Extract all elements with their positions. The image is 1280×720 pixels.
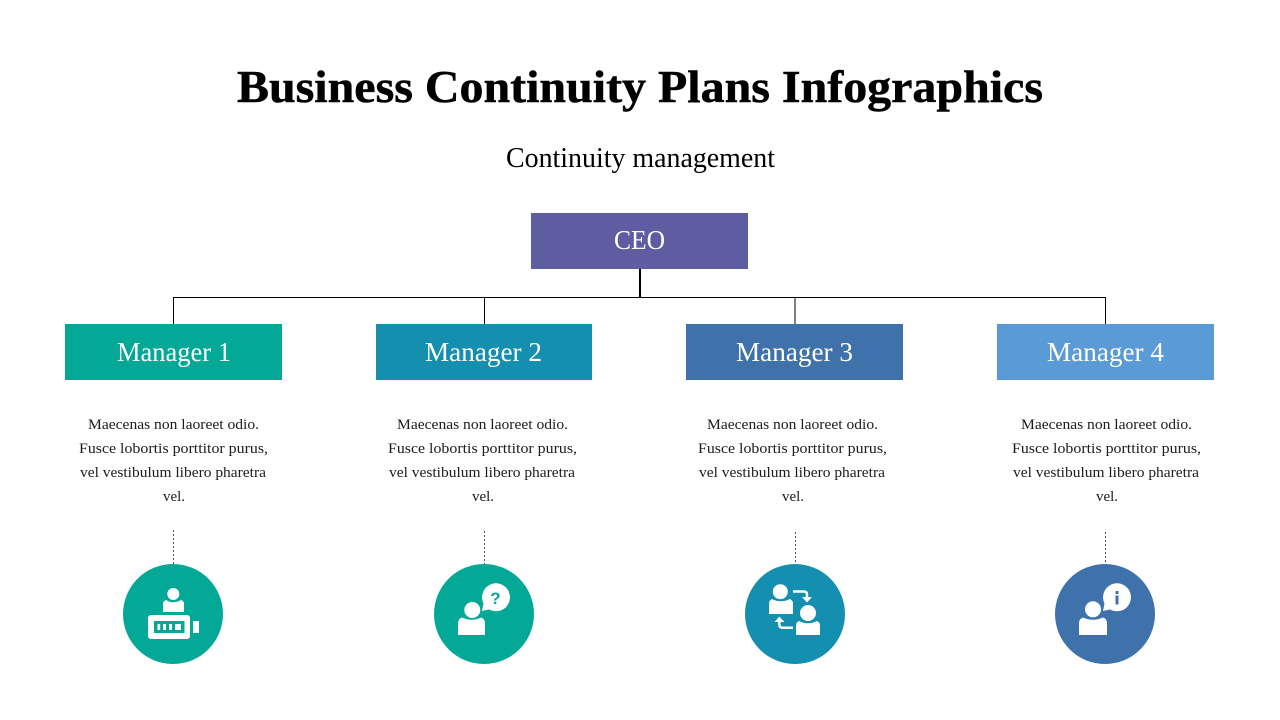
manager 3 box: Manager 3 bbox=[736, 337, 853, 367]
manager 2 description: vel vestibulum libero pharetra bbox=[389, 465, 576, 481]
manager 1 description: Fusce lobortis porttitor purus, bbox=[79, 441, 268, 457]
manager 4 description bbox=[1012, 417, 1201, 505]
org chart connector lines bbox=[174, 269, 1106, 324]
CEO box bbox=[531, 213, 748, 269]
manager 1 box: Manager 1 bbox=[117, 337, 231, 367]
manager 2 box bbox=[376, 324, 592, 380]
panel: manager 2 bbox=[376, 324, 592, 664]
icon: person with info bubble bbox=[1055, 564, 1155, 664]
manager 3 box bbox=[686, 324, 903, 380]
manager 2 description: Fusce lobortis porttitor purus, bbox=[388, 441, 577, 457]
panel: manager 4 bbox=[997, 324, 1214, 664]
icon: two people exchanging bbox=[745, 564, 845, 664]
manager 4 description: Fusce lobortis porttitor purus, bbox=[1012, 441, 1201, 457]
manager 3 description: vel. bbox=[782, 489, 804, 505]
manager 1 description bbox=[79, 417, 268, 505]
manager 4 description: vel vestibulum libero pharetra bbox=[1013, 465, 1200, 481]
icon: person with battery camera bbox=[123, 564, 223, 664]
manager 3 description: vel vestibulum libero pharetra bbox=[699, 465, 886, 481]
manager 2 box: Manager 2 bbox=[425, 337, 542, 367]
manager 4 box: Manager 4 bbox=[1047, 337, 1165, 367]
manager 1 description: Maecenas non laoreet odio. bbox=[88, 417, 259, 433]
manager 4 dotted connector bbox=[1104, 532, 1106, 564]
manager 2 description: vel. bbox=[472, 489, 494, 505]
panel: manager 1 bbox=[65, 324, 282, 664]
manager 1 description: vel. bbox=[163, 489, 185, 505]
manager 3 dotted connector bbox=[794, 532, 796, 564]
manager 1 box bbox=[65, 324, 282, 380]
manager 2 description: Maecenas non laoreet odio. bbox=[397, 417, 568, 433]
manager 4 description: Maecenas non laoreet odio. bbox=[1021, 417, 1192, 433]
icon: person with question bubble bbox=[434, 564, 534, 664]
panel: manager 3 bbox=[686, 324, 903, 664]
manager 3 description bbox=[698, 417, 887, 505]
subtitle: Continuity management bbox=[506, 143, 775, 174]
manager 4 description: vel. bbox=[1096, 489, 1118, 505]
CEO box: CEO bbox=[614, 225, 665, 255]
icon: person with question bubble: ? bbox=[490, 589, 501, 608]
title: Business Continuity Plans Infographics bbox=[237, 61, 1043, 112]
manager 2 description bbox=[388, 417, 577, 505]
manager 2 dotted connector bbox=[484, 531, 486, 564]
manager 3 description: Fusce lobortis porttitor purus, bbox=[698, 441, 887, 457]
manager 4 box bbox=[997, 324, 1214, 380]
manager 1 description: vel vestibulum libero pharetra bbox=[80, 465, 267, 481]
manager 1 dotted connector bbox=[172, 530, 174, 564]
manager 3 description: Maecenas non laoreet odio. bbox=[707, 417, 878, 433]
